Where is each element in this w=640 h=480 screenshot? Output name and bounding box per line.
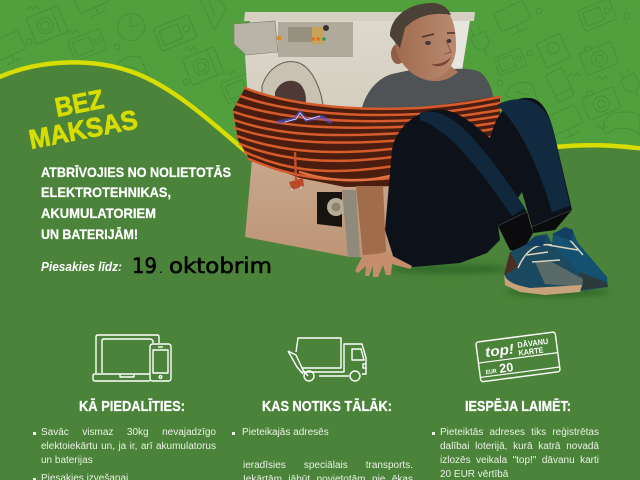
photo: man head: [390, 3, 456, 79]
text block: chance to win: [432, 427, 599, 480]
icon: truck: [288, 338, 366, 381]
headline text: [41, 164, 231, 242]
photo: jeans: [385, 98, 572, 267]
deadline: oktobrim: [169, 254, 272, 279]
photo: man torso: [361, 62, 495, 130]
shadows under figure: [390, 264, 610, 297]
badge: BEZ MAKSAS: BEZ: [52, 84, 106, 123]
photo: washing machine: [234, 12, 475, 258]
headline text: UN BATERIJĀM!: [41, 226, 138, 242]
icon: laptop and phone: [93, 335, 171, 381]
deadline: [41, 254, 272, 279]
photo: wrapped orange cable: [233, 88, 500, 187]
text block: what happens next: Pieteikajās adresēs: [242, 427, 329, 438]
heading: Iespēja laimēt: IESPĒJA LAIMĒT:: [465, 398, 571, 415]
icon: gift card: DĀVANU: [517, 337, 549, 350]
text block: chance to win: dalībai loterijā, kurā katrā novadā: [440, 441, 599, 452]
icon: gift card: EUR: [485, 369, 498, 376]
text block: what happens next: ieradīsies speciālais transports.: [243, 460, 413, 471]
photo: electric spark: [278, 112, 330, 122]
headline text: AKUMULATORIEM: [41, 205, 156, 221]
deadline: Piesakies līdz:: [41, 260, 122, 274]
photo: arm and hand: [355, 186, 412, 277]
photo: shoes: [504, 227, 608, 295]
headline text: ELEKTROTEHNIKAS,: [41, 184, 171, 200]
deadline: .: [159, 262, 163, 276]
text block: what happens next: [232, 427, 413, 480]
headline text: ATBRĪVOJIES NO NOLIETOTĀS: [41, 164, 231, 180]
icon: gift card: 20: [498, 360, 514, 376]
text block: how to participate: Savāc vismaz 30kg nevajadzīgo: [41, 427, 216, 438]
text block: chance to win: Pieteiktās adreses tiks reģistrētas: [440, 427, 599, 438]
heading: Kā piedalīties: KĀ PIEDALĪTIES:: [79, 398, 185, 415]
heading: Kas notiks tālāk: KAS NOTIKS TĀLĀK:: [262, 398, 392, 415]
text block: how to participate: [33, 427, 216, 480]
icon: gift card: top!: [484, 340, 515, 360]
text block: chance to win: izlozēs veikala "top!" dāvanu karti: [440, 455, 599, 466]
background pattern: appliance icons: [0, 0, 640, 142]
text block: how to participate: un baterijas: [41, 455, 93, 466]
photo: cable plug: [289, 152, 304, 191]
text block: chance to win: 20 EUR vērtībā: [440, 469, 508, 480]
icon: gift card: KARTE: [518, 345, 544, 358]
text block: how to participate: elektoiekārtu un, ja ir, arī akumulatorus: [41, 441, 216, 452]
deadline: 19: [132, 254, 157, 279]
photo: socks: [498, 210, 572, 253]
icon: gift card: [476, 332, 560, 382]
badge: BEZ MAKSAS: MAKSAS: [26, 104, 140, 155]
